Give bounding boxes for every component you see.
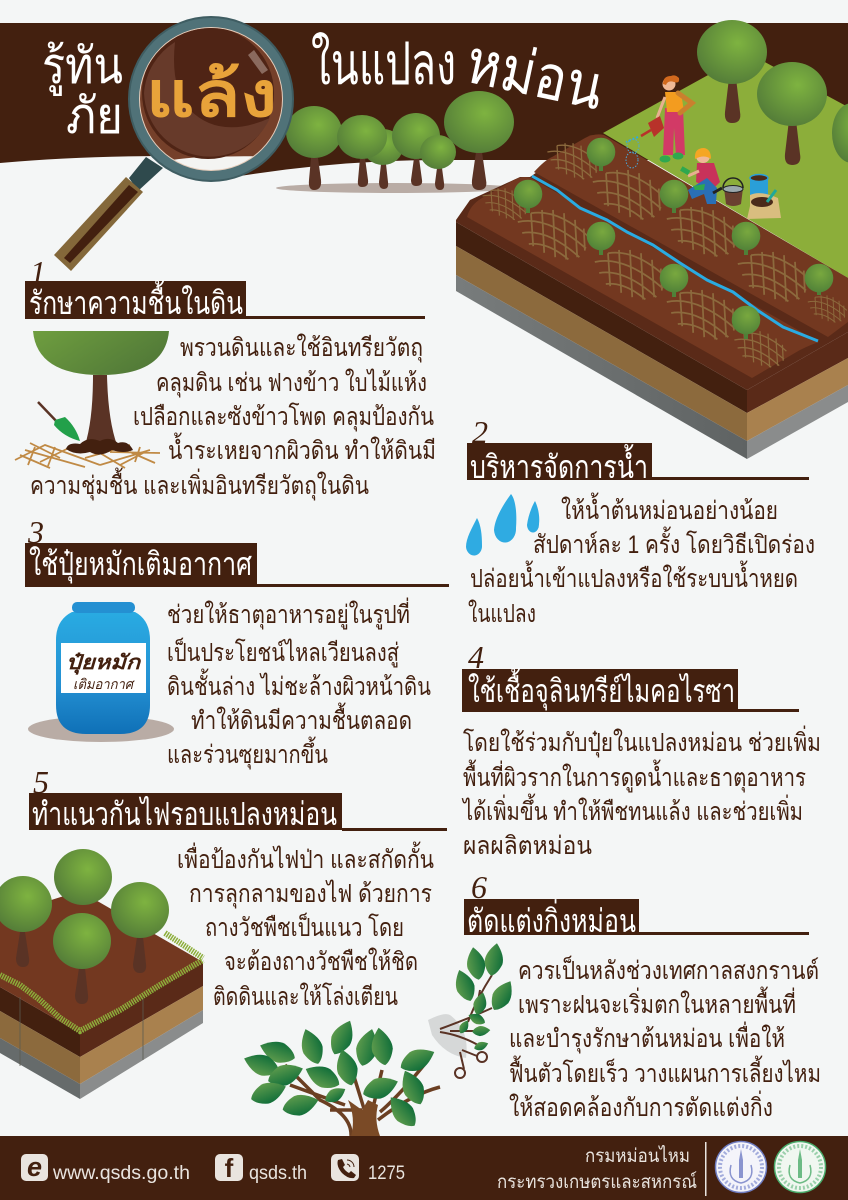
mulberry tree illustration	[241, 1016, 440, 1136]
body text 5: การลุกลามของไฟ ด้วยการ	[189, 879, 432, 909]
phone contact	[331, 1154, 405, 1184]
body text 3: ทำให้ดินมีความชื้นตลอด	[191, 702, 412, 735]
icon: pruning shears and branch	[428, 942, 518, 1078]
heading 3: ใช้ปุ๋ยหมักเติมอากาศ	[29, 546, 252, 584]
isometric firebreak plot	[0, 849, 203, 1099]
body text 3: ดินชั้นล่าง ไม่ชะล้างผิวหน้าดิน	[167, 668, 431, 701]
magnifying glass	[54, 17, 300, 271]
website contact: www.qsds.go.th	[52, 1163, 190, 1184]
body text 6: และบำรุงรักษาต้นหม่อน เพื่อให้	[509, 1021, 785, 1054]
heading 2: บริหารจัดการน้ำ	[470, 444, 648, 485]
heading 3	[25, 543, 449, 587]
ministry names: กรมหม่อนไหม	[585, 1145, 690, 1167]
icon: compost jar	[28, 602, 174, 742]
facebook contact: qsds.th	[249, 1163, 307, 1184]
body text 3: เป็นประโยชน์ไหลเวียนลงสู่	[167, 637, 399, 668]
website contact	[21, 1152, 190, 1184]
body text 1: น้ำระเหยจากผิวดิน ทำให้ดินมี	[168, 432, 436, 465]
facebook contact: f	[225, 1153, 234, 1183]
body text 3: ช่วยให้ธาตุอาหารอยู่ในรูปที่	[167, 597, 410, 630]
icon: compost jar: ปุ๋ยหมัก	[66, 652, 142, 675]
body text 1	[30, 333, 436, 501]
heading 1	[25, 280, 425, 321]
body text 4: ผลผลิตหม่อน	[463, 832, 592, 860]
body text 2: ในแปลง	[468, 599, 536, 628]
mulch patches	[483, 143, 847, 367]
section 2	[466, 414, 815, 628]
title word: drought: แล้ง	[146, 61, 277, 130]
title: รู้ทัน	[42, 38, 123, 96]
farmer kneeling	[680, 148, 722, 204]
number 5: 5	[33, 764, 49, 800]
icon: compost jar: เติมอากาศ	[73, 676, 135, 692]
section 4	[461, 639, 821, 860]
body text 1: คลุมดิน เช่น ฟางข้าว ใบไม้แห้ง	[156, 368, 427, 398]
title: หม่อน	[460, 27, 609, 123]
phone contact: 1275	[368, 1163, 405, 1184]
body text 6: เพราะฝนจะเริ่มตกในหลายพื้นที่	[518, 986, 796, 1019]
header banner	[0, 23, 848, 176]
number 1: 1	[30, 254, 46, 290]
number 4: 4	[468, 639, 484, 675]
body text 5	[177, 841, 434, 1011]
banner tree group	[276, 91, 514, 193]
rear planting bed	[534, 134, 848, 337]
body text 5: เพื่อป้องกันไฟป่า และสกัดกั้น	[177, 841, 434, 874]
young mulberry shrubs	[514, 138, 833, 339]
facebook contact	[215, 1153, 307, 1184]
icon: tree with mulch and trowel	[15, 331, 169, 468]
heading 4: ใช้เชื้อจุลินทรีย์ไมคอไรซา	[468, 668, 735, 711]
body text 1: พรวนดินและใช้อินทรียวัตถุ	[180, 333, 423, 363]
body text 5: ติดดินและให้โล่งเตียน	[213, 982, 398, 1011]
ministry names: กระทรวงเกษตรและสหกรณ์	[497, 1171, 697, 1193]
body text 2: ให้น้ำต้นหม่อนอย่างน้อย	[561, 492, 778, 525]
section 1	[15, 254, 436, 501]
body text 1: ความชุ่มชื้น และเพิ่มอินทรียวัตถุในดิน	[30, 467, 369, 501]
bucket, pail and sack	[723, 174, 781, 219]
body text 5: จะต้องถางวัชพืชให้ชิด	[224, 947, 418, 976]
body text 3	[167, 597, 431, 770]
heading 6: ตัดแต่งกิ่งหม่อน	[467, 899, 636, 939]
icon: water drops	[466, 494, 539, 556]
logo: department seal	[716, 1142, 766, 1192]
irrigation line	[532, 176, 818, 341]
front planting bed	[467, 177, 819, 378]
logo: ministry seal	[774, 1142, 826, 1192]
heading 2	[467, 443, 809, 485]
heading 6	[464, 899, 809, 939]
body text 5: ถางวัชพืชเป็นแนว โดย	[205, 912, 404, 942]
section 6	[428, 869, 821, 1122]
body text 1: เปลือกและซังข้าวโพด คลุมป้องกัน	[133, 402, 434, 432]
body text 6: ให้สอดคล้องกับการตัดแต่งกิ่ง	[509, 1090, 773, 1122]
number 3: 3	[27, 514, 44, 550]
body text 2	[468, 492, 815, 628]
farmer with watering can	[626, 75, 692, 168]
section 5	[0, 764, 447, 1099]
footer bar	[0, 1136, 848, 1200]
green field with trees	[603, 20, 848, 278]
title: ภัย	[66, 88, 123, 144]
title: ในแปลง	[311, 31, 456, 97]
body text 6	[509, 955, 821, 1122]
ministry names	[497, 1145, 697, 1193]
number 2: 2	[472, 414, 488, 450]
section 3	[25, 514, 449, 770]
isometric soil block	[456, 134, 848, 459]
website contact: e	[27, 1152, 42, 1182]
title	[42, 27, 609, 144]
heading 5: ทำแนวกันไฟรอบแปลงหม่อน	[32, 796, 337, 832]
body text 4	[461, 725, 821, 860]
heading 1: รักษาความชื้นในดิน	[29, 280, 243, 321]
number 6: 6	[471, 869, 487, 905]
body text 3: และร่วนซุยมากขึ้น	[167, 736, 328, 770]
